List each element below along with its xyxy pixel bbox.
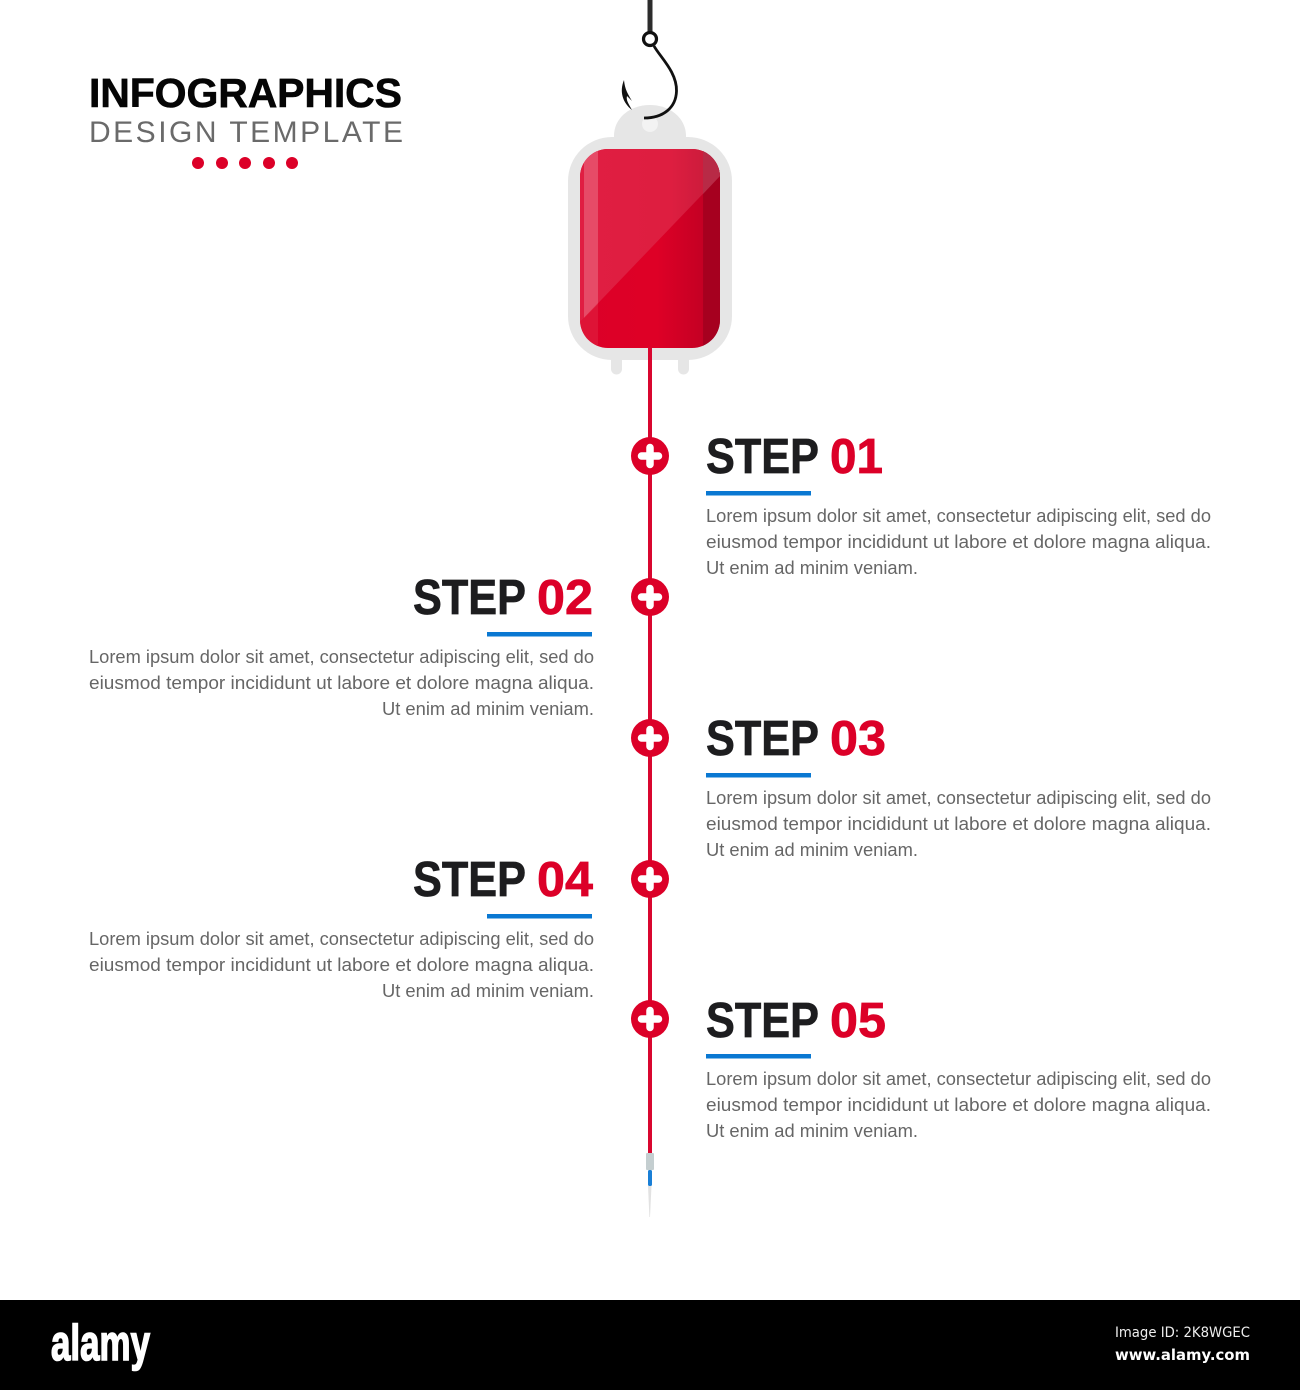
heading: step 05: 05 [830,994,886,1048]
body text: Ut enim ad minim veniam. [706,558,918,578]
timeline tube line [648,347,652,1156]
underline [706,1054,811,1058]
footer bar [0,1300,1300,1390]
heading: step 04: 04 [537,853,593,907]
title block [89,70,403,169]
website: www.alamy.com [1115,1346,1250,1364]
body text: Lorem ipsum dolor sit amet, consectetur adipiscing elit, sed do [706,1069,1211,1089]
watermark logo: alamy [51,1315,150,1371]
step 05 marker [631,1000,669,1038]
icon: blood bag [568,105,732,374]
heading: step 02: STEP [413,571,526,625]
heading: step 03: STEP [706,712,819,766]
subheading: design template: DESIGN TEMPLATE [89,116,403,149]
body text: Ut enim ad minim veniam. [706,1121,918,1141]
underline [487,914,592,918]
body text: Lorem ipsum dolor sit amet, consectetur adipiscing elit, sed do [706,788,1211,808]
heading: step 02: 02 [537,571,593,625]
step 04 block [89,853,594,1001]
underline [706,773,811,778]
body text: eiusmod tempor incididunt ut labore et dolore magna aliqua. [706,814,1211,834]
body text: Lorem ipsum dolor sit amet, consectetur adipiscing elit, sed do [89,647,594,667]
heading: step 03: 03 [830,712,886,766]
heading: step 01: STEP [706,430,819,484]
step 02 block [89,571,594,719]
heading: infographics: INFOGRAPHICS [89,70,402,116]
icon: needle [646,1153,654,1217]
body text: eiusmod tempor incididunt ut labore et dolore magna aliqua. [89,673,594,693]
underline [487,632,592,636]
heading: step 01: 01 [830,430,883,484]
icon: fishing hook and line [622,0,677,118]
body text: Ut enim ad minim veniam. [706,840,918,860]
image id: Image ID: 2K8WGEC [1115,1325,1250,1341]
step 03 marker [631,719,669,757]
step 01 block [706,430,1211,578]
underline [706,491,811,496]
body text: eiusmod tempor incididunt ut labore et dolore magna aliqua. [89,955,594,975]
step 03 block [706,712,1211,860]
heading: step 04: STEP [413,853,526,907]
body text: eiusmod tempor incididunt ut labore et dolore magna aliqua. [706,1095,1211,1115]
decorative red dots [192,157,298,169]
step 01 marker [631,437,669,475]
body text: Ut enim ad minim veniam. [382,699,594,719]
step 05 block [706,994,1211,1141]
body text: Ut enim ad minim veniam. [382,981,594,1001]
step 02 marker [631,578,669,616]
body text: Lorem ipsum dolor sit amet, consectetur adipiscing elit, sed do [89,929,594,949]
body text: eiusmod tempor incididunt ut labore et dolore magna aliqua. [706,532,1211,552]
step 04 marker [631,860,669,898]
body text: Lorem ipsum dolor sit amet, consectetur adipiscing elit, sed do [706,506,1211,526]
heading: step 05: STEP [706,994,819,1048]
